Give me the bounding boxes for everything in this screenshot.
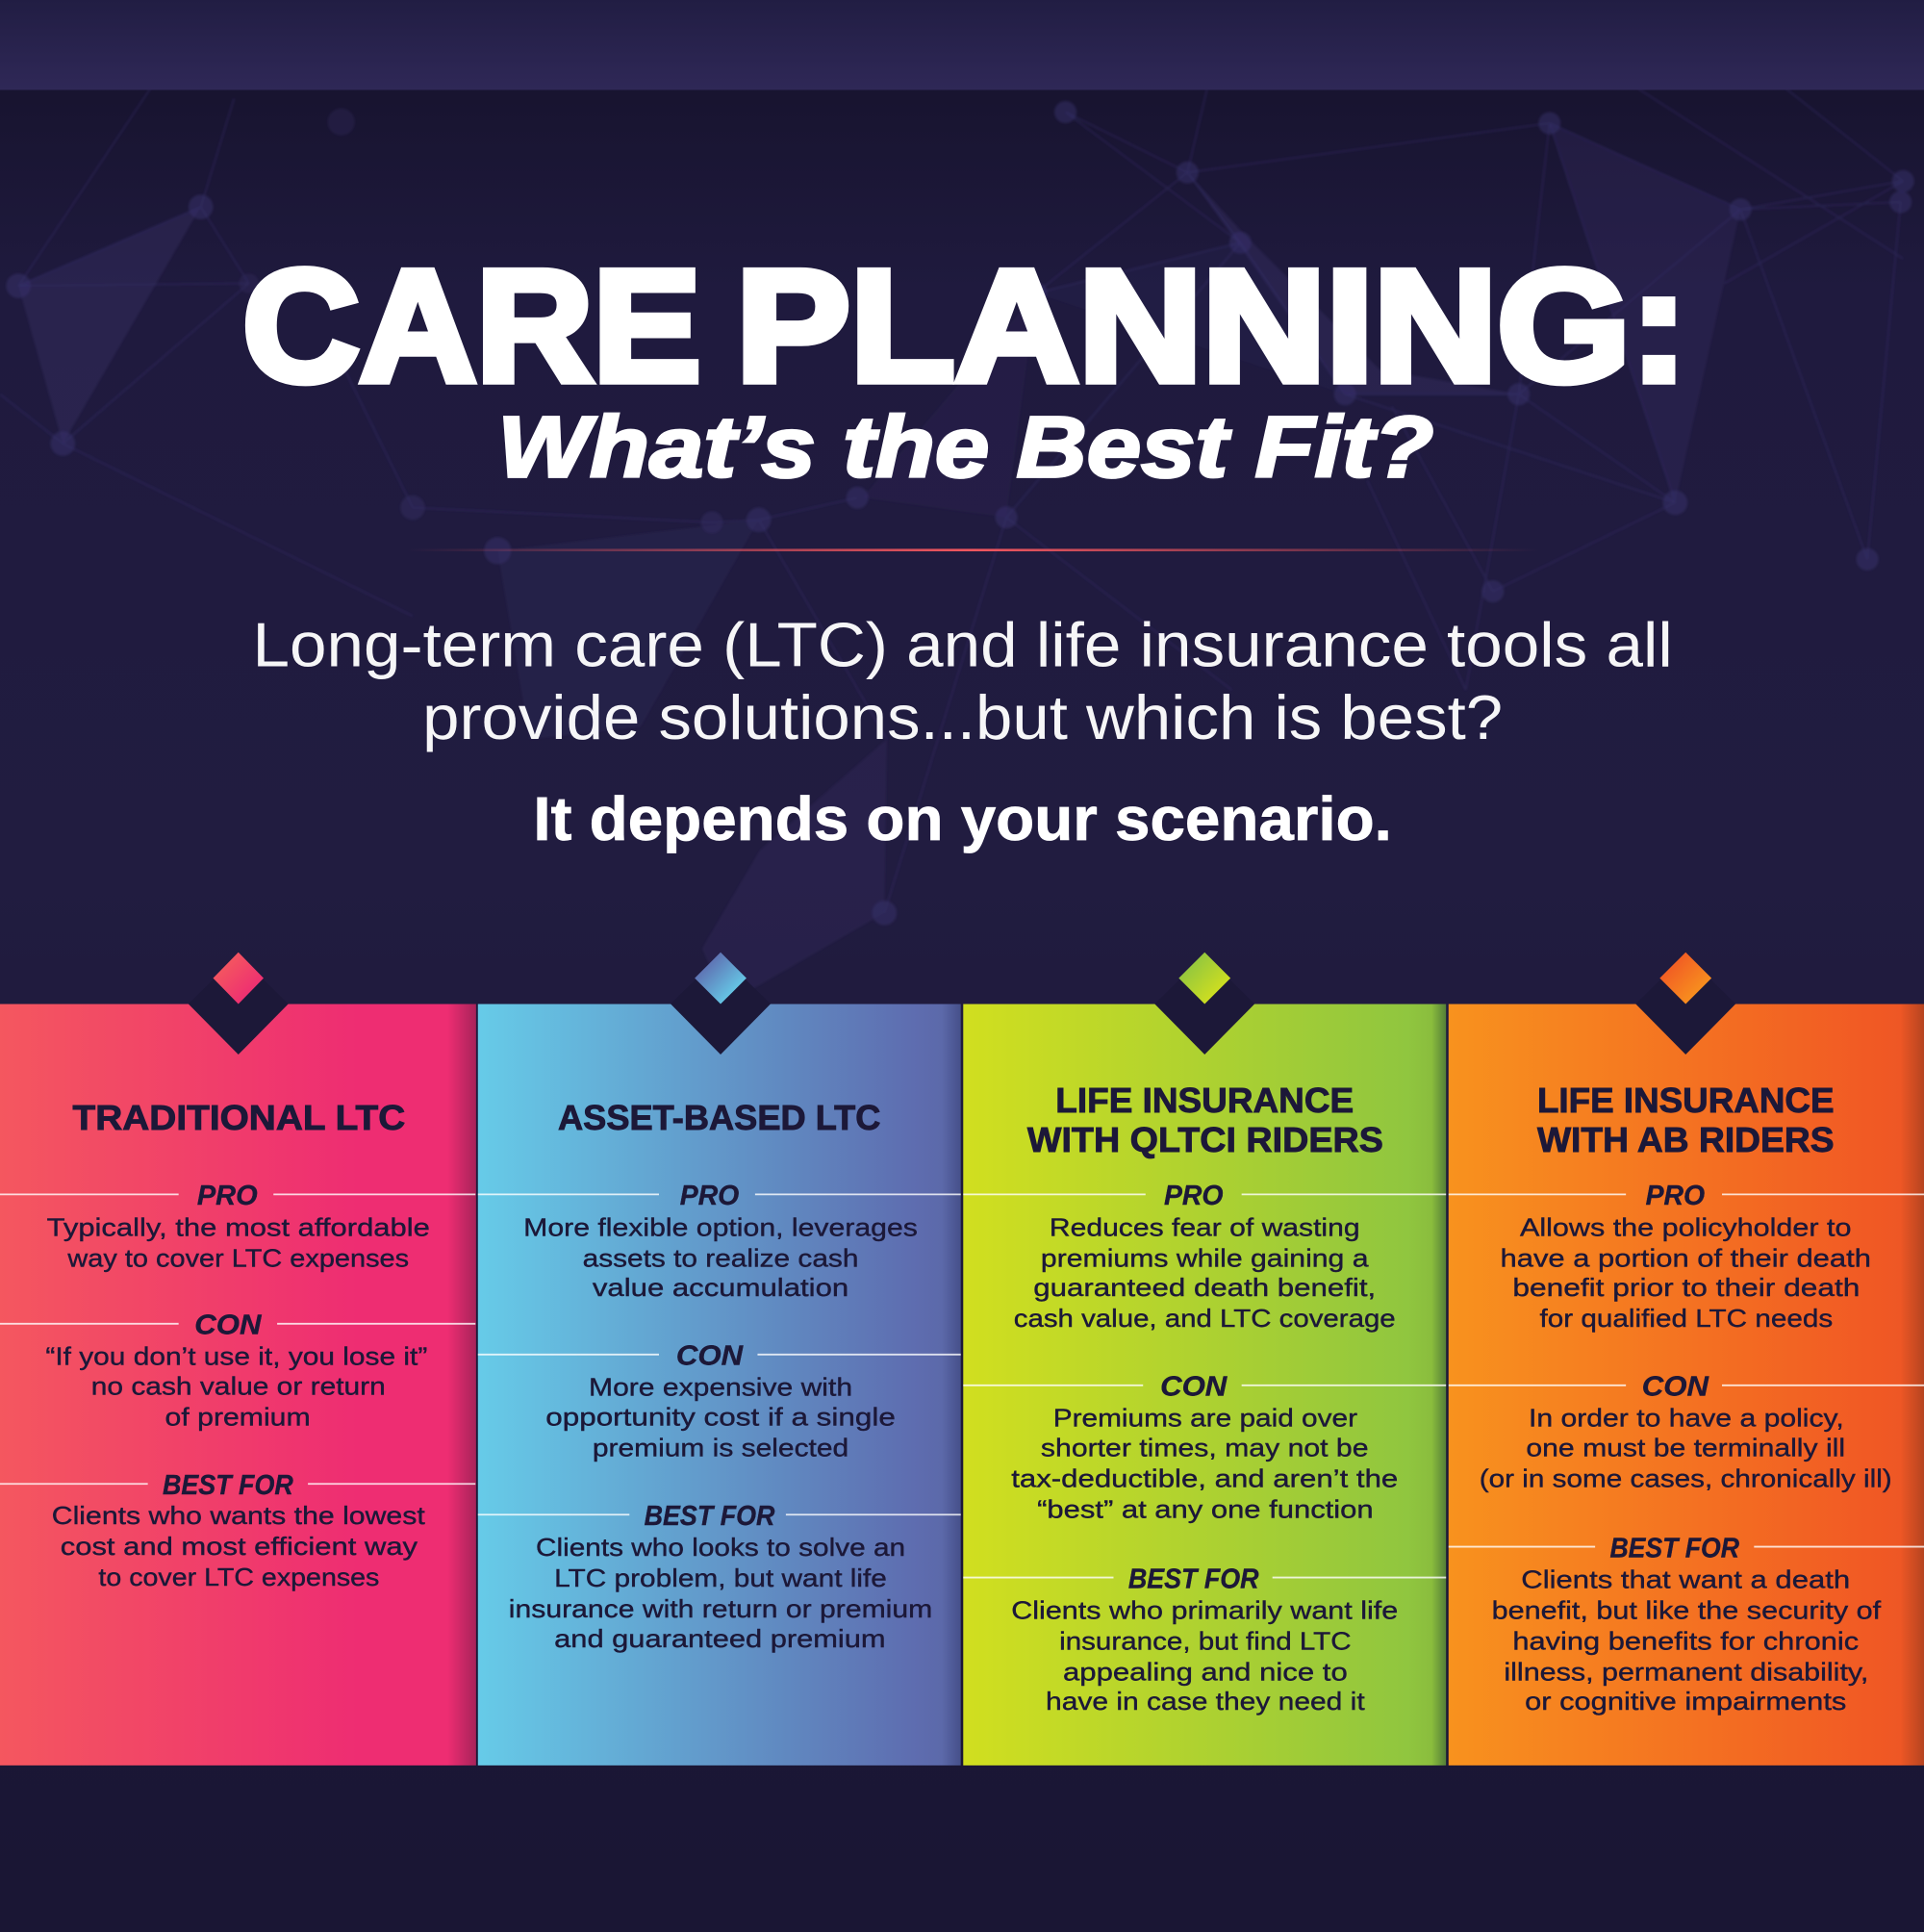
pro section: Typically, the most affordable: [47, 1214, 430, 1241]
panel: asset-based LTC: [478, 953, 961, 1766]
con section: CON: [1160, 1372, 1228, 1403]
con section: CON: [1642, 1372, 1709, 1403]
con section: In order to have a policy,: [1529, 1406, 1844, 1433]
best for section: [1449, 1533, 1924, 1716]
pro section: assets to realize cash: [583, 1245, 858, 1272]
best for section: illness, permanent disability,: [1504, 1659, 1868, 1686]
pro section: guaranteed death benefit,: [1033, 1275, 1376, 1302]
best for section: to cover LTC expenses: [98, 1564, 379, 1591]
pro section: value accumulation: [593, 1275, 848, 1302]
best for section: Clients who looks to solve an: [536, 1535, 905, 1562]
best for section: [478, 1501, 961, 1653]
icon: pink diamond marker: [189, 953, 289, 1055]
pro section: [478, 1181, 961, 1302]
pro section: Allows the policyholder to: [1520, 1214, 1851, 1241]
red divider: [407, 548, 1540, 551]
con section: CON: [676, 1341, 744, 1372]
con section: opportunity cost if a single: [545, 1404, 896, 1431]
best for section: Clients that want a death: [1521, 1566, 1850, 1593]
best for section: insurance with return or premium: [509, 1596, 932, 1623]
con section: one must be terminally ill: [1526, 1435, 1845, 1462]
pro section: [1449, 1181, 1924, 1333]
pro section: PRO: [197, 1181, 258, 1211]
heading: TRADITIONAL LTC: [73, 1098, 405, 1137]
best for section: BEST FOR: [1609, 1533, 1739, 1563]
best for section: LTC problem, but want life: [554, 1565, 887, 1592]
con section: no cash value or return: [91, 1373, 386, 1400]
con section: (or in some cases, chronically ill): [1480, 1465, 1892, 1492]
con section: [478, 1341, 961, 1462]
pro section: have a portion of their death: [1501, 1245, 1871, 1272]
con section: “If you don’t use it, you lose it”: [45, 1344, 427, 1371]
pro section: benefit prior to their death: [1512, 1275, 1860, 1302]
key statement: It depends on your scenario.: [533, 784, 1392, 853]
best for section: insurance, but find LTC: [1059, 1628, 1352, 1655]
heading: [1027, 1080, 1383, 1159]
best for section: and guaranteed premium: [554, 1626, 886, 1653]
best for section: appealing and nice to: [1063, 1659, 1348, 1686]
heading: LIFE INSURANCE: [1537, 1080, 1835, 1120]
heading: LIFE INSURANCE: [1055, 1080, 1354, 1120]
con section: “best” at any one function: [1037, 1496, 1374, 1523]
intro text: provide solutions...but which is best?: [422, 682, 1503, 752]
best for section: cost and most efficient way: [61, 1534, 418, 1561]
pro section: PRO: [1164, 1181, 1223, 1211]
pro section: way to cover LTC expenses: [66, 1245, 409, 1272]
con section: of premium: [165, 1404, 311, 1431]
con section: More expensive with: [589, 1375, 852, 1402]
background network pattern: [0, 74, 1914, 1004]
panel: traditional LTC: [0, 953, 476, 1766]
pro section: [0, 1181, 475, 1272]
con section: premium is selected: [593, 1435, 848, 1462]
panel: life insurance with AB riders: [1449, 953, 1924, 1766]
title: PLANNING:: [736, 238, 1687, 416]
subtitle: What’s the Best Fit?: [497, 399, 1433, 496]
best for section: having benefits for chronic: [1512, 1628, 1859, 1655]
best for section: BEST FOR: [163, 1470, 293, 1501]
pro section: cash value, and LTC coverage: [1014, 1306, 1396, 1333]
pro section: More flexible option, leverages: [523, 1214, 918, 1241]
best for section: [963, 1563, 1446, 1716]
con section: shorter times, may not be: [1041, 1435, 1369, 1462]
con section: [963, 1372, 1446, 1523]
best for section: Clients who wants the lowest: [52, 1503, 425, 1530]
con section: tax-deductible, and aren’t the: [1011, 1465, 1398, 1492]
pro section: [963, 1181, 1446, 1333]
pro section: Reduces fear of wasting: [1050, 1214, 1360, 1241]
best for section: benefit, but like the security of: [1492, 1597, 1882, 1624]
con section: Premiums are paid over: [1053, 1406, 1358, 1433]
pro section: PRO: [680, 1181, 739, 1211]
con section: CON: [194, 1310, 263, 1341]
title: CARE: [242, 238, 701, 416]
con section: [1449, 1372, 1924, 1492]
icon: blue diamond marker: [671, 953, 771, 1055]
best for section: or cognitive impairments: [1525, 1689, 1846, 1716]
best for section: BEST FOR: [1128, 1563, 1259, 1594]
pro section: premiums while gaining a: [1041, 1245, 1369, 1272]
heading: WITH QLTCI RIDERS: [1027, 1120, 1383, 1159]
heading: WITH AB RIDERS: [1537, 1120, 1835, 1159]
best for section: Clients who primarily want life: [1011, 1597, 1398, 1624]
best for section: [0, 1470, 475, 1591]
pro section: PRO: [1646, 1181, 1705, 1211]
intro text: [252, 610, 1673, 752]
best for section: have in case they need it: [1046, 1689, 1365, 1716]
pro section: for qualified LTC needs: [1540, 1306, 1833, 1333]
intro text: Long-term care (LTC) and life insurance tools all: [252, 610, 1673, 680]
panel: life insurance with QLTCI riders: [963, 953, 1446, 1766]
heading: ASSET-BASED LTC: [558, 1098, 880, 1137]
icon: green diamond marker: [1154, 953, 1254, 1055]
con section: [0, 1310, 475, 1431]
icon: orange diamond marker: [1635, 953, 1735, 1055]
top band: [0, 0, 1924, 89]
heading: [1537, 1080, 1835, 1159]
best for section: BEST FOR: [645, 1501, 775, 1532]
title: [242, 238, 1687, 416]
